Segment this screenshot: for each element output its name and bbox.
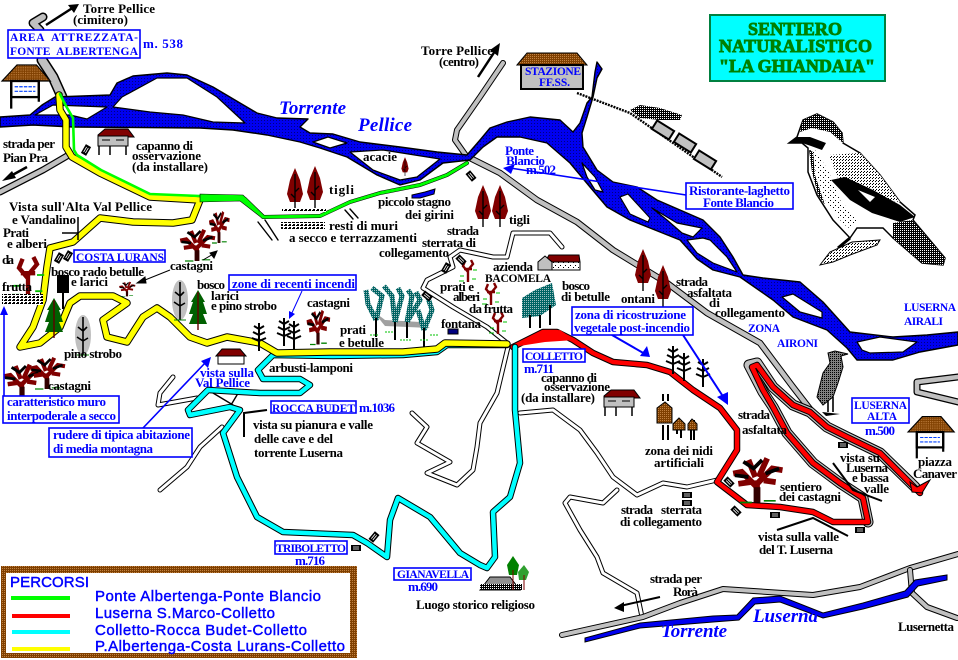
arrow: to Rorà	[614, 597, 660, 612]
label: Ristorante-laghetto: Ristorante-laghetto	[689, 183, 790, 198]
label: strada sterrata di collegamento	[379, 223, 480, 260]
label: strada per Pian Pra: strada per	[3, 136, 55, 151]
label: tigli: tigli	[329, 182, 354, 197]
label: Torre Pellice centro	[421, 43, 493, 69]
label: Luserna Alta	[852, 398, 909, 438]
trees: tigli Bacomela	[475, 185, 508, 227]
label: Torrente Luserna: Luserna	[752, 606, 818, 627]
label: Ponte Blancio: Blancio	[506, 153, 545, 168]
label: vista alta val pellice	[9, 199, 152, 227]
label: vista su pianura: torrente Luserna	[254, 445, 344, 460]
label: zona aironi: AIRONI	[777, 338, 819, 350]
label: Rocca Budet	[271, 400, 396, 415]
label: Rocca Budet: m.1036	[359, 400, 396, 415]
label: zona dei nidi: zona dei nidi	[645, 443, 713, 458]
label: prati e alberi da frutta: Prati	[3, 225, 29, 240]
label: tigli: tigli	[509, 212, 530, 227]
label: Ponte Blancio	[505, 143, 556, 177]
label: sentiero dei castagni: dei castagni	[779, 489, 841, 504]
label: bosco di betulle: di betulle	[561, 289, 610, 304]
label: vista su Luserna: valle	[864, 481, 889, 496]
icon: Gianavella house and trees	[480, 556, 529, 590]
label: zona aironi	[748, 323, 819, 350]
label: strada sterrata di collegamento	[620, 502, 702, 529]
label: Torre Pellice cimitero	[73, 1, 155, 27]
road: Pian Pra	[0, 156, 67, 192]
label: Luogo storico religioso: Luogo storico religioso	[416, 597, 535, 612]
label: Torre Pellice cimitero: (cimitero)	[73, 12, 128, 27]
label: costa lurans: COSTA LURANS	[76, 252, 164, 264]
tree: sentiero dei castagni	[733, 458, 782, 502]
label: prati e alberi da frutta: e alberi	[7, 236, 47, 251]
label: strada per Rorà	[650, 571, 702, 599]
legend: percorsi: PERCORSI	[10, 574, 89, 591]
label: prati e betulle	[339, 322, 384, 350]
legend: percorsi: Colletto-Rocca Budet-Colletto	[95, 622, 307, 639]
label: zona di ricostruzione: vegetale post-incendio	[574, 320, 690, 335]
label: capanno Colletto: capanno di	[541, 370, 597, 385]
trail: Colletto-Rocca Budet-Colletto (cyan)	[188, 345, 520, 568]
label: prati e betulle: prati	[340, 322, 366, 337]
trail: Luserna S.Marco-Colletto (red)	[513, 330, 930, 522]
label: vista su Luserna	[840, 450, 890, 496]
label: prati e alberi da frutta: da	[2, 252, 14, 267]
arrow: to Pian Pra	[2, 167, 27, 181]
label: Torre Pellice centro: Torre Pellice	[421, 43, 493, 58]
label: prati e betulle: e betulle	[339, 335, 384, 350]
label: bosco larici: e pino strobo	[211, 298, 277, 313]
label: arbusti-lamponi: arbusti-lamponi	[269, 360, 353, 375]
label: vista sulla valle: vista sulla valle	[758, 529, 839, 544]
label: piccolo stagno	[378, 194, 454, 222]
label: Torre Pellice cimitero: Torre Pellice	[83, 1, 155, 16]
label: bosco larici	[197, 277, 277, 313]
label: Torrente Pellice: Pellice	[357, 115, 413, 136]
trail: Luserna alta gray base	[749, 363, 915, 522]
label: prati e alberi da frutta: da frutta	[469, 301, 514, 316]
road: Torre Pellice centro	[455, 63, 503, 157]
label: Lusernetta: Lusernetta	[898, 619, 954, 634]
road: strada asfaltata lungo il Pellice	[470, 158, 810, 409]
icon: heron	[817, 351, 848, 416]
label: capanno Colletto: osservazione	[544, 379, 610, 394]
label: capanno di osservazione: osservazione	[132, 148, 201, 163]
icon: nest boxes	[657, 394, 697, 440]
label: Luserna Alta: LUSERNA	[854, 400, 908, 412]
label: Colletto: COLLETTO	[525, 351, 583, 363]
label: zona aironi: ZONA	[748, 323, 781, 335]
label: castagni: castagni	[307, 295, 350, 310]
label: vista sulla valle	[758, 529, 839, 557]
icon: area attrezzata sign	[2, 65, 50, 109]
trees: ontani	[635, 249, 671, 307]
icon: rudere	[216, 349, 246, 364]
label: strada asfaltata: asfaltata	[742, 422, 788, 437]
icon: jay bird	[789, 114, 945, 265]
label: Triboletto	[275, 541, 347, 568]
label: area attrezzata: AREA ATTREZZATA-	[10, 32, 138, 44]
trees: prati e betulle	[366, 286, 438, 347]
railway and train	[577, 93, 722, 177]
legend: percorsi	[1, 566, 357, 658]
legend: percorsi: Luserna S.Marco-Colletto	[95, 605, 275, 622]
label: strada per Pian Pra	[3, 136, 55, 165]
label: Colletto	[523, 349, 585, 376]
label: m.538: m. 538	[143, 36, 184, 51]
label: prati e alberi da frutta	[440, 279, 514, 316]
label: rudere	[49, 427, 192, 457]
label: vista alta val pellice: e Vandalino	[12, 212, 76, 227]
label: Luserna Airali: AIRALI	[904, 316, 944, 328]
station: FF.SS.	[539, 77, 570, 89]
label: Rocca Budet: ROCCA BUDET	[272, 403, 355, 415]
trail: Ponte Albertenga-Ponte Blancio (green)	[60, 94, 467, 218]
arrows: blue callouts	[0, 164, 728, 428]
arrow: to Torre Pellice centro	[478, 43, 500, 77]
pointer lines	[62, 217, 882, 536]
label: strada asfaltata di collegamento: strada	[676, 274, 708, 289]
label: strada sterrata di collegamento: sterrata	[661, 502, 702, 517]
label: Triboletto: TRIBOLETTO	[276, 543, 346, 555]
label: vista su Luserna: e bassa	[852, 470, 890, 485]
label: strada asfaltata di collegamento: collegamento	[715, 305, 785, 320]
label: zona di ricostruzione: zona di ricostruzione	[575, 307, 686, 322]
label: caratteristico muro	[3, 394, 119, 423]
label: ontani: ontani	[621, 291, 655, 306]
station: STAZIONE	[525, 66, 581, 78]
label: fontana: fontana	[441, 316, 482, 331]
icon: capanno Albertenga	[98, 129, 134, 155]
trees: pini	[45, 275, 207, 355]
label: Ristorante-laghetto	[686, 183, 793, 210]
road: bassa valle Luserna	[562, 377, 958, 635]
tree: acacie	[401, 157, 409, 176]
label: Ponte Blancio: Ponte	[505, 143, 534, 158]
label: bosco larici: larici	[211, 288, 239, 303]
label: bosco di betulle: bosco	[562, 278, 590, 293]
trees: castagni Costa Lurans	[180, 212, 230, 261]
label: Luserna Airali	[904, 302, 957, 328]
icon: walls	[2, 222, 325, 305]
label: strada per Rorà: Rorà	[673, 584, 698, 599]
road: Torre Pellice cimitero	[33, 17, 62, 97]
label: piazza Canaver: Canaver	[913, 466, 957, 481]
label: capanno Colletto: (da installare)	[521, 390, 595, 405]
label: Ponte Blancio: m.502	[526, 162, 556, 177]
label: Torrente Pellice	[279, 98, 413, 136]
trees: castagni bassi	[4, 358, 65, 398]
arrow: to Torre Pellice cimitero	[46, 4, 79, 25]
label: strada asfaltata: strada	[738, 407, 770, 422]
label: Gianavella: m.690	[408, 579, 438, 594]
label: Gianavella: GIANAVELLA	[397, 569, 470, 581]
road: strade sterrate	[158, 209, 717, 617]
label: zona dei nidi: artificiali	[654, 455, 704, 470]
label: pino strobo: pino strobo	[64, 346, 122, 361]
trees: tigli	[282, 166, 326, 212]
label: Ristorante-laghetto: Fonte Blancio	[703, 195, 774, 210]
label: Torrente Luserna	[661, 606, 818, 642]
label: rudere: rudere di tipica abitazione	[53, 427, 190, 442]
label: sentiero dei castagni	[779, 479, 841, 504]
legend: percorsi: P.Albertenga-Costa Lurans-Colletto	[95, 638, 345, 655]
label: azienda Bacomela: azienda	[493, 259, 534, 274]
label: castagni: castagni	[170, 258, 213, 273]
label: Luserna Alta: m.500	[865, 423, 895, 438]
label: capanno di osservazione: capanno di	[136, 138, 193, 153]
river: piccolo stagno	[412, 189, 435, 198]
label: rudere: di media montagna	[53, 441, 154, 456]
icon: markers along paths	[54, 144, 865, 551]
box: title: SENTIERO	[748, 19, 842, 39]
label: vista su Luserna: vista su	[840, 450, 880, 465]
label: capanno di osservazione	[132, 138, 208, 174]
label: Luserna Alta: ALTA	[867, 411, 898, 423]
label: Gianavella	[394, 568, 471, 594]
label: sentiero dei castagni: sentiero	[780, 479, 822, 494]
label: strada per Pian Pra: Pian Pra	[3, 150, 48, 165]
label: strada sterrata di collegamento: strada	[447, 223, 480, 238]
trees: burnt zone recent fires	[252, 318, 301, 351]
label: castagni: castagni	[48, 378, 91, 393]
trail: P.Albertenga-Costa Lurans-Colletto (yellow)	[20, 95, 507, 353]
label: strada sterrata di collegamento: sterrata di	[422, 235, 476, 250]
label: prati e alberi da frutta: alberi	[453, 289, 480, 304]
box: title: NATURALISTICO	[719, 36, 872, 56]
icon: Luserna alta sign	[908, 417, 954, 458]
label: Torrente Pellice: Torrente	[279, 98, 347, 119]
river islands	[35, 78, 917, 353]
label: caratteristico muro: caratteristico muro	[7, 394, 106, 409]
label: area attrezzata: FONTE ALBERTENGA	[10, 46, 139, 58]
label: strada sterrata di collegamento: strada	[621, 502, 654, 517]
label: prati e alberi da frutta: prati e	[440, 279, 474, 294]
river: Torrente Luserna	[585, 575, 947, 642]
label: piccolo stagno: dei girini	[405, 207, 454, 222]
trees: frutta Bacomela	[459, 260, 507, 334]
label: prati e alberi da frutta: frutta	[2, 279, 32, 294]
label: bosco di betulle	[561, 278, 610, 304]
label: Triboletto: m.716	[295, 553, 326, 568]
label: capanno di osservazione: (da installare)	[132, 159, 208, 174]
label: bosco rado	[51, 264, 144, 289]
tree: castagno piccolo	[119, 282, 135, 296]
icon: capanno Colletto	[604, 390, 640, 416]
label: bosco rado: e larici	[71, 274, 108, 289]
label: piazza Canaver	[913, 454, 957, 481]
label: acacie: acacie	[363, 149, 397, 164]
label: strada sterrata di collegamento: di collegamento	[620, 514, 702, 529]
station	[517, 53, 587, 89]
label: Torrente Luserna: Torrente	[661, 621, 728, 642]
label: vista sulla Val Pellice: vista sulla	[200, 365, 254, 380]
label: vista sulla Val Pellice	[195, 365, 254, 390]
tree: castagni incendi	[307, 311, 330, 344]
river: Torrente Pellice	[0, 62, 958, 360]
label: vista su pianura: delle cave e del	[254, 431, 333, 446]
label: strada asfaltata	[738, 407, 788, 437]
label: Luserna Airali: LUSERNA	[904, 302, 957, 314]
label: zone di recenti incendi: zone di recenti incendi	[232, 276, 355, 291]
label: strada asfaltata di collegamento: di	[709, 295, 720, 310]
icon: Bacomela farm	[538, 255, 580, 270]
label: vista sulla valle: del T. Luserna	[759, 542, 834, 557]
label: strada sterrata di collegamento: collegamento	[379, 245, 449, 260]
label: strada asfaltata di collegamento: asfaltata	[687, 285, 732, 300]
trees: burnt zone ricostruzione	[666, 346, 710, 387]
legend: percorsi: Ponte Albertenga-Ponte Blancio	[95, 588, 321, 605]
label: bosco rado: bosco rado betulle	[51, 264, 144, 279]
label: Colletto: m.711	[524, 361, 554, 376]
box: title: "LA GHIANDAIA"	[719, 56, 875, 76]
label: caratteristico muro: interpoderale a secco	[7, 408, 116, 423]
label: resti di muri	[289, 218, 417, 245]
label: azienda Bacomela: BACOMELA	[485, 273, 552, 285]
trees: alberi da frutta	[12, 257, 44, 297]
label: piazza Canaver: piazza	[918, 454, 952, 469]
box: title	[710, 15, 885, 81]
label: strada per Rorà: strada per	[650, 571, 702, 586]
trees: bosco di betulle	[522, 283, 556, 328]
label: strada asfaltata di collegamento	[676, 274, 785, 320]
label: resti di muri: a secco e terrazzamenti	[289, 230, 417, 245]
label: zona dei nidi	[645, 443, 713, 470]
label: azienda Bacomela	[485, 259, 552, 285]
label: capanno Colletto	[521, 370, 610, 405]
label: vista su Luserna: Luserna	[846, 460, 888, 475]
label: prati e alberi da frutta	[2, 225, 47, 294]
label: piccolo stagno: piccolo stagno	[378, 194, 451, 209]
label: vista alta val pellice: Vista sull'Alta Val Pellice	[9, 199, 152, 214]
label: Torre Pellice centro: (centro)	[439, 54, 479, 69]
label: resti di muri: resti di muri	[329, 218, 398, 233]
label: vista su pianura: vista su pianura e valle	[253, 417, 373, 432]
label: vista su pianura	[253, 417, 373, 460]
label: vista sulla Val Pellice: Val Pellice	[195, 375, 250, 390]
label: area attrezzata	[8, 30, 140, 58]
label: bosco larici: bosco	[197, 277, 225, 292]
label: zona di ricostruzione	[572, 307, 693, 335]
